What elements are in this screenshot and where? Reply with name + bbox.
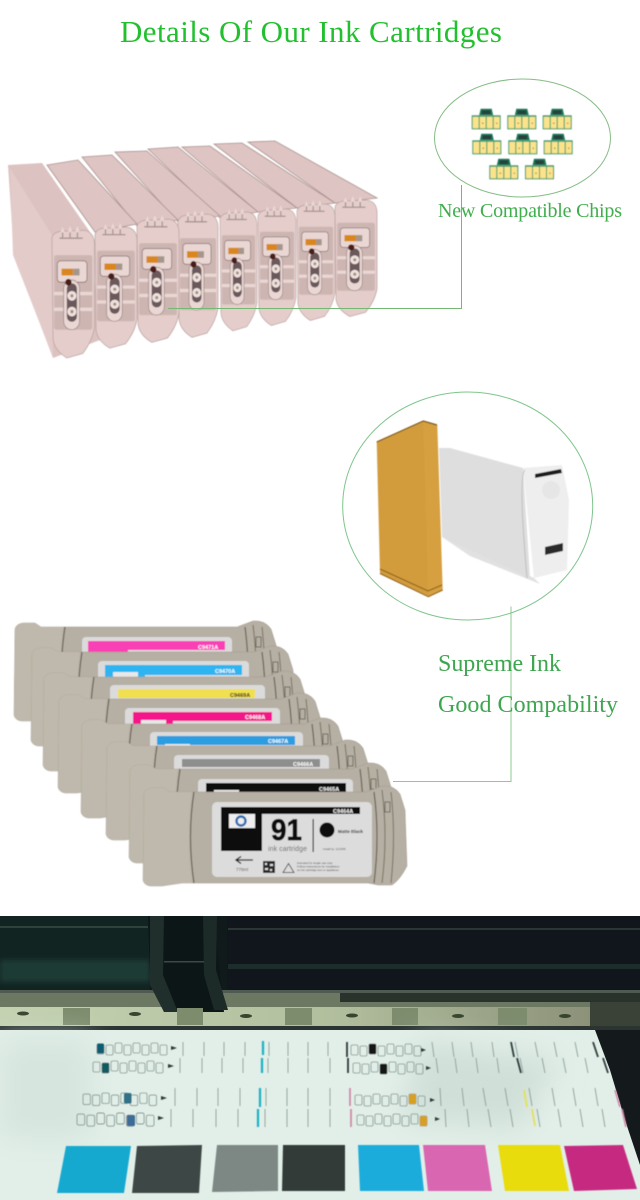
patch: cyan (57, 1146, 131, 1193)
fine print: on ink cartridge box or appliance. (297, 868, 340, 872)
front cartridge label: Matte Black (338, 829, 364, 834)
front cartridge label (212, 802, 372, 877)
fine print: Follow instructions for installation (297, 864, 340, 868)
connector line: cartridges to chips (168, 185, 462, 308)
photo: eight cartridges, number 91: C9465A (319, 787, 339, 793)
patch: mid grey (212, 1145, 278, 1192)
photo: eight cartridges, number 91: C9467A (268, 739, 288, 745)
photo: printer printing test sheet (0, 916, 640, 1200)
patch: light magenta (423, 1145, 492, 1191)
photo: orange box (377, 421, 443, 597)
icon: warning triangle (283, 864, 294, 872)
label: new compatible chips: New Compatible Chips (438, 200, 622, 222)
icon: black ink dot (320, 822, 334, 838)
photo: eight cartridges, number 91: C9470A (215, 669, 235, 675)
connector line: circle to black cartridges (393, 606, 511, 782)
patch: yellow (498, 1145, 569, 1191)
feed notches (17, 1008, 571, 1025)
callout circle: compatible chips (434, 79, 610, 197)
roller mechanism (148, 916, 228, 1012)
photo: eight cartridges, number 91: C9466A (293, 762, 313, 768)
colour patches (57, 1145, 637, 1193)
paper (0, 1030, 640, 1200)
icon: recycle logo (229, 814, 255, 828)
number 91: 91 (271, 814, 302, 847)
icon: arrow (236, 856, 253, 864)
photo: eight cartridges, number 91: C9469A (230, 693, 250, 699)
front cartridge label: Install by: 11/2009 (323, 847, 346, 851)
label: supreme ink: Supreme Ink (438, 651, 561, 677)
patch: dark grey (132, 1145, 202, 1193)
title: Details Of Our Ink Cartridges (120, 14, 502, 49)
patch: cyan (358, 1145, 424, 1191)
icons: chips (472, 109, 573, 179)
label: good compability: Good Compability (438, 692, 618, 718)
callout circle: box and cartridge (343, 392, 593, 620)
print test rows (77, 1041, 626, 1127)
photo: eight cartridges, number 91: C9468A (245, 715, 265, 721)
fine print: Intended for single use only. (297, 861, 333, 865)
front cartridge label: ink cartridge (268, 846, 307, 853)
patch: black (282, 1145, 345, 1191)
patch: magenta (564, 1145, 637, 1191)
photo: white cartridge (439, 448, 569, 584)
photo: eight cartridges, number 91: C9471A (198, 645, 218, 651)
icon: QR code (263, 861, 275, 873)
photo: eight cartridges, number 91 (14, 621, 407, 886)
photo: eight pink ink cartridges (8, 141, 377, 358)
printer body (0, 916, 640, 1030)
front cartridge label: 775ml (236, 867, 248, 872)
front cartridge label: C9464A (333, 809, 353, 815)
